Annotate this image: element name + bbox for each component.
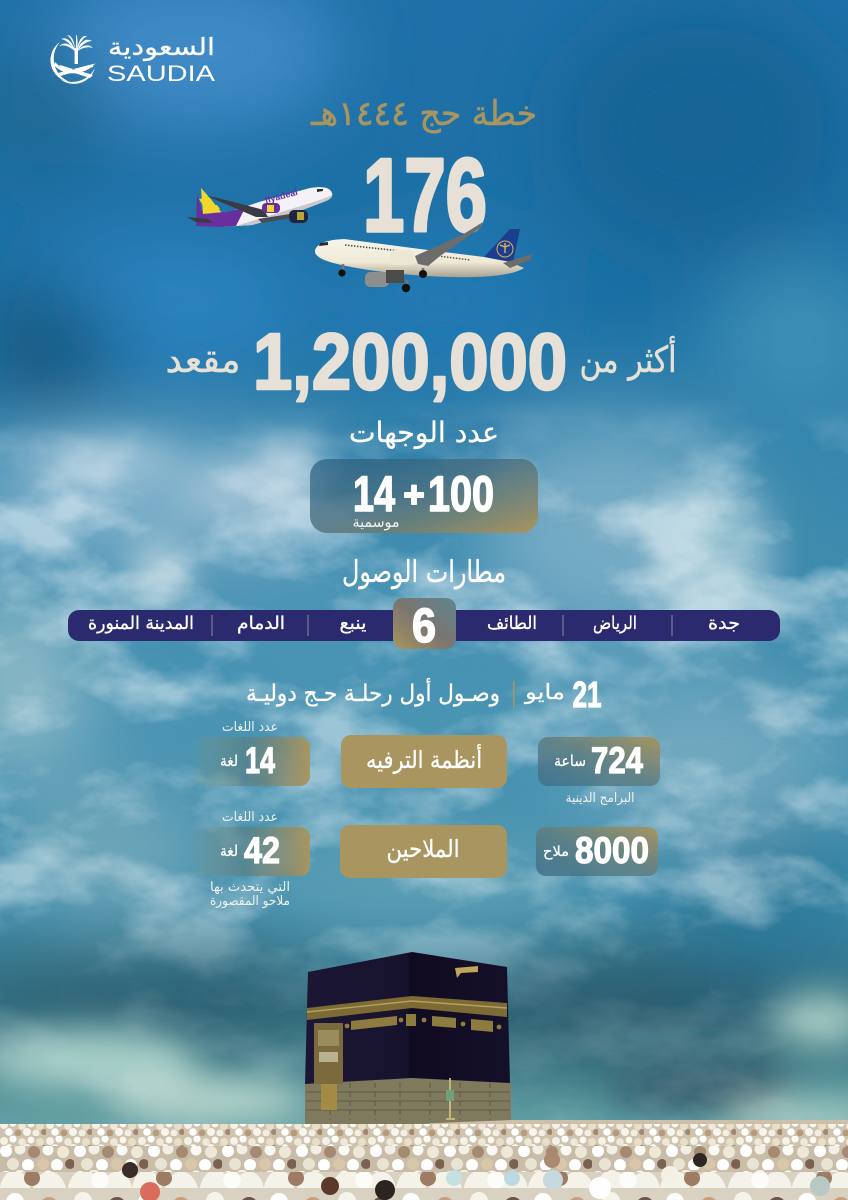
caption: crew languages note [210,880,290,909]
number 100: 100 [428,466,494,522]
row: entertainment systems [190,720,660,806]
seats label: seat: مقعد [166,340,240,381]
panel: crew languages: لغة [220,842,238,860]
caption: languages count: عدد اللغات [222,720,278,735]
kaaba cloth [305,952,510,1084]
panel: crew label: الملاحين [386,835,460,863]
fleet number: 176 [363,138,487,254]
plus sign: + [403,474,425,515]
gold inscription panels [345,1014,501,1032]
plane: flyadeal [187,187,332,227]
airport: Madinah: المدينة المنورة [88,613,194,634]
airport: Dammam: الدمام [237,613,285,634]
gold band [307,996,507,1020]
airport: Jeddah: جدة [708,613,740,634]
number 14: 14 [353,466,395,522]
date number: 21 [572,674,602,715]
caption: crew languages note: التي يتحدث بها [210,880,290,895]
caption: religious programs: البرامج الدينية [566,791,634,806]
gold waterspout [455,966,478,978]
caption: crew languages note: ملاحو المقصورة [210,894,290,909]
panel: religious programs hours: ساعة [554,752,586,770]
airports count number: 6 [412,600,436,653]
panel: crew count [536,827,658,876]
panel: religious programs hours: 724 [591,740,643,781]
airport: Riyadh: الرياض [593,613,637,634]
panel: entertainment languages [190,737,310,786]
icon: palm and crossed swords emblem [50,34,96,84]
kaaba door [314,1023,343,1110]
row: cabin crew [190,810,658,909]
seats row [166,317,676,406]
heading: destinations: عدد الوجهات [349,416,499,449]
ground platform [430,1120,848,1128]
date month: مايو [524,680,565,704]
seats number: 1,200,000 [253,317,567,406]
logo text arabic: السعودية [108,33,215,61]
airport: Taif: الطائف [487,613,537,634]
title: خطة حج ١٤٤٤هـ [310,94,537,134]
airport: Yanbu: ينبع [340,613,366,634]
panel: airports bar [68,598,780,653]
panel: religious programs hours [538,737,660,786]
panel: destinations count [310,459,538,533]
panel: crew languages [190,827,310,876]
logo: Saudia [50,33,215,86]
caption: languages count: عدد اللغات [222,810,278,825]
first flight text: وصـول أول رحلـة حـج دوليـة [246,678,500,707]
seats label: more than: أكثر من [580,336,676,381]
panel: entertainment label [341,735,507,788]
panel: crew count: ملاح [543,844,569,860]
panel: crew count: 8000 [575,830,649,871]
first flight row [246,674,602,715]
illustration: Kaaba [305,952,848,1128]
panel: entertainment languages: 14 [245,740,275,781]
panel: crew label [340,825,507,878]
kaaba stone base [305,1078,511,1124]
plane: Saudia [315,222,533,292]
airports count badge [393,598,456,649]
illustration: crowd of pilgrims [0,1124,848,1200]
logo text latin: SAUDIA [107,61,215,86]
seasonal label: موسمية [352,513,400,531]
lantern [446,1078,455,1119]
panel: entertainment label: أنظمة الترفيه [366,744,482,774]
plane: flyadeal: flyadeal [264,187,299,205]
panel: crew languages: 42 [244,830,280,871]
heading: arrival airports: مطارات الوصول [342,555,506,590]
panel: entertainment languages: لغة [220,752,238,770]
